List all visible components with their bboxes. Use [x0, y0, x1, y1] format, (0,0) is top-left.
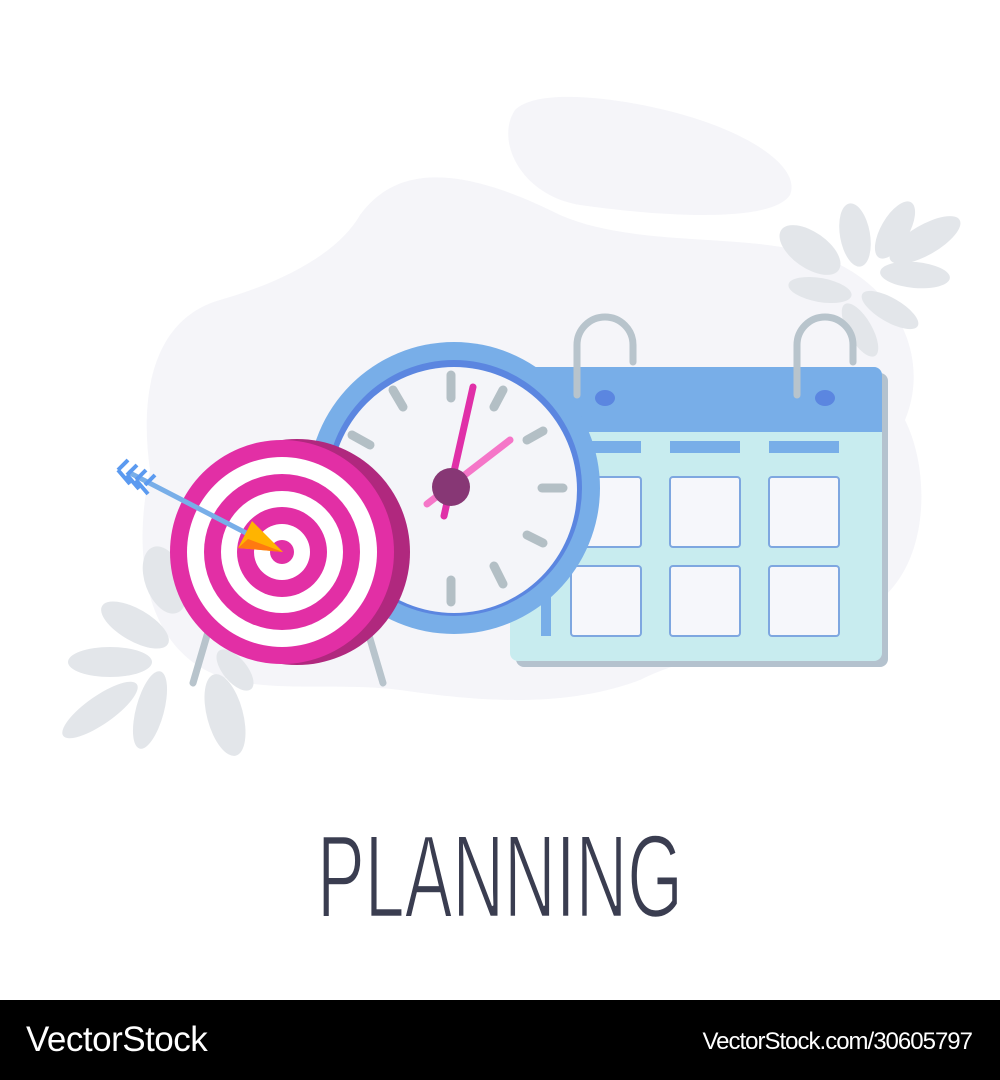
footer url: VectorStock.com/30605797 — [702, 1028, 972, 1055]
footer bar — [0, 1000, 1000, 1080]
footer brand: VectorStock — [26, 1020, 207, 1059]
title: PLANNING — [317, 811, 683, 943]
leaves top right — [771, 195, 967, 362]
target — [118, 439, 410, 683]
calendar — [510, 317, 888, 667]
leaves bottom left — [55, 540, 260, 760]
arrow — [118, 460, 283, 552]
background blobs — [143, 97, 921, 700]
clock — [308, 342, 600, 634]
